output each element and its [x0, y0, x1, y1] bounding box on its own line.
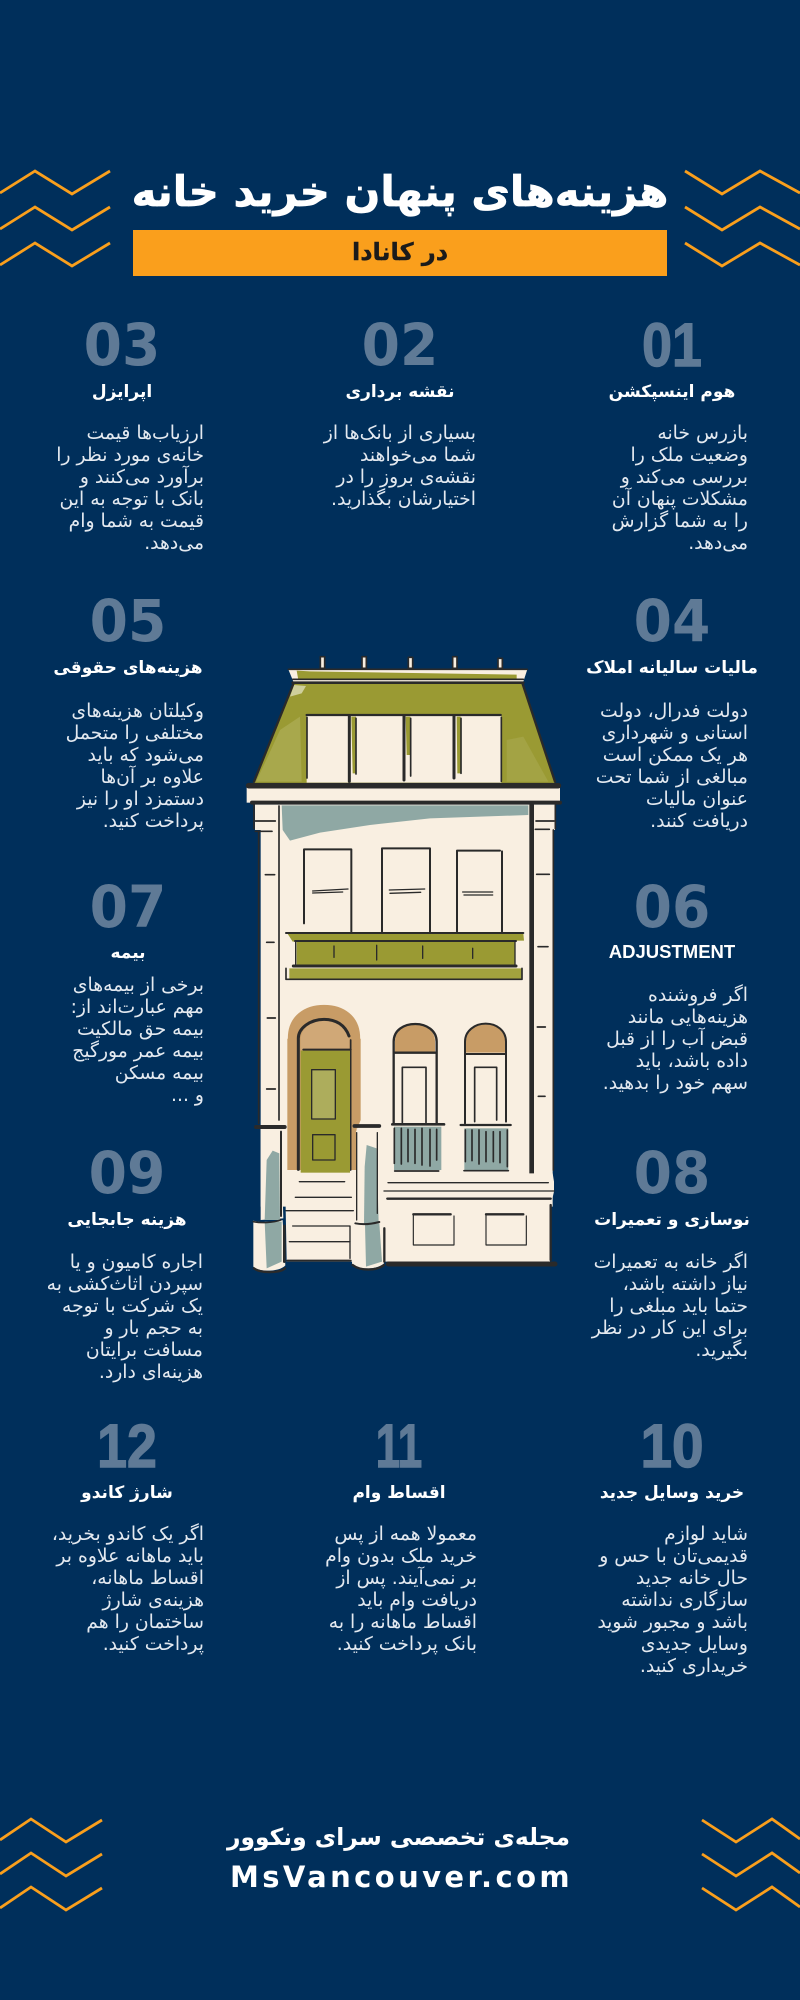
left pier	[261, 1128, 283, 1220]
panel: 07 insurance: بیمه مسکن	[115, 1063, 204, 1084]
panel: 02 survey: شما می‌خواهند	[360, 445, 476, 466]
panel: 05 legal costs: می‌شود که باید	[87, 745, 204, 766]
basement windows	[413, 1211, 523, 1218]
panel: 09 moving cost: یک شرکت با توجه	[62, 1296, 203, 1317]
panel: 03 appraisal: 03	[84, 311, 160, 379]
panel: 11 loan installments: بر نمی‌آیند. پس از	[336, 1568, 477, 1589]
panel: 08 renovation: بگیرید.	[695, 1340, 748, 1361]
illustration: townhouse	[246, 656, 562, 1274]
panel: 01 home inspection: می‌دهد.	[688, 533, 748, 554]
panel: 11 loan installments: 11	[376, 1412, 422, 1480]
finials	[320, 657, 502, 668]
panel: 07 insurance: بیمه عمر مورگیج	[72, 1041, 204, 1062]
panel: 01 home inspection	[609, 311, 748, 554]
panel: 02 survey: اختیارشان بگذارید.	[331, 489, 476, 510]
panel: 09 moving cost: 09	[89, 1139, 165, 1207]
panel: 10 new appliances: قدیمی‌تان با حس و	[599, 1546, 748, 1567]
panel: 11 loan installments: خرید ملک بدون وام	[325, 1546, 477, 1567]
panel: 11 loan installments: اقساط ماهانه را به	[329, 1612, 477, 1633]
panel: 08 renovation: برای این کار در نظر	[592, 1318, 748, 1339]
entrance arch	[287, 1004, 361, 1170]
panel: 04 property tax: مالیات سالیانه املاک	[586, 658, 758, 678]
mansard roof	[253, 684, 555, 783]
panel: 12 condo fee: شارژ کاندو	[81, 1483, 173, 1503]
door	[301, 1051, 350, 1173]
panel: 05 legal costs: وکیلتان هزینه‌های	[71, 701, 204, 722]
panel: 01 home inspection: هوم اینسپکشن	[609, 382, 735, 402]
grey wash	[282, 805, 528, 841]
subtitle banner	[133, 230, 667, 276]
panel: 06 adjustment: قبض آب را از قبل	[606, 1029, 748, 1050]
panel: 09 moving cost	[47, 1139, 203, 1383]
panel: 10 new appliances: سازگاری نداشته	[621, 1590, 748, 1611]
panel: 09 moving cost: به حجم بار و	[104, 1318, 203, 1339]
panel: 07 insurance: و ...	[171, 1085, 204, 1106]
panel: 11 loan installments: اقساط وام	[352, 1483, 446, 1503]
panel: 08 renovation: 08	[634, 1139, 710, 1207]
arched window 1	[395, 1024, 435, 1053]
panel: 11 loan installments	[325, 1412, 477, 1655]
panel: 07 insurance	[71, 873, 204, 1106]
panel: 04 property tax: استانی و شهرداری	[602, 723, 748, 744]
panel: 03 appraisal: برآورد می‌کنند و	[80, 467, 204, 488]
panel: 05 legal costs: دستمزد او را نیز	[77, 789, 204, 810]
balcony	[287, 933, 524, 942]
panel: 02 survey: نقشه برداری	[345, 382, 455, 402]
panel: 12 condo fee	[52, 1412, 204, 1655]
panel: 05 legal costs: پرداخت کنید.	[103, 811, 204, 832]
panel: 06 adjustment: داده باشد، باید	[636, 1051, 748, 1072]
footer: magazine name: مجله‌ی تخصصی سرای ونکوور	[227, 1823, 570, 1851]
panel: 08 renovation: حتما باید مبلغی را	[609, 1296, 748, 1317]
panel: 10 new appliances: وسایل جدیدی	[641, 1634, 748, 1655]
panel: 10 new appliances: حال خانه جدید	[636, 1568, 748, 1589]
panel: 11 loan installments: دریافت وام باید	[357, 1590, 477, 1611]
zigzag decoration: bottom left	[0, 1817, 103, 1912]
panel: 08 renovation	[590, 1139, 750, 1361]
dormer windows	[307, 715, 501, 783]
panel: 09 moving cost: سپردن اثاث‌کشی به	[47, 1274, 203, 1295]
panel: 01 home inspection: را به شما گزارش	[612, 511, 748, 532]
panel: 12 condo fee: اگر یک کاندو بخرید،	[52, 1524, 204, 1545]
stairs	[286, 1182, 353, 1242]
pilaster and wall lines	[254, 805, 555, 1170]
panel: 03 appraisal: خانه‌ی مورد نظر را	[56, 445, 204, 466]
panel: 04 property tax: عنوان مالیات	[646, 789, 748, 810]
panel: 12 condo fee: پرداخت کنید.	[103, 1634, 204, 1655]
panel: 03 appraisal: می‌دهد.	[144, 533, 204, 554]
panel: 12 condo fee: اقساط ماهانه،	[91, 1568, 204, 1589]
base wall	[285, 1173, 554, 1262]
subtitle banner: در کانادا	[352, 238, 448, 266]
title: هزینه‌های پنهان خرید خانه	[132, 167, 668, 216]
panel: 12 condo fee: هزینه‌ی شارژ	[102, 1590, 204, 1611]
panel: 10 new appliances: خرید وسایل جدید	[600, 1483, 744, 1503]
panel: 01 home inspection: بازرس خانه	[657, 423, 748, 444]
panel: 01 home inspection: مشکلات پنهان آن	[612, 489, 748, 510]
panel: 11 loan installments: معمولا همه از پس	[334, 1524, 477, 1545]
panel: 09 moving cost: مسافت برایتان	[86, 1340, 203, 1361]
panel: 06 adjustment: ADJUSTMENT	[609, 941, 735, 962]
panel: 11 loan installments: بانک پرداخت کنید.	[337, 1634, 477, 1655]
panel: 12 condo fee: باید ماهانه علاوه بر	[56, 1546, 204, 1567]
panel: 07 insurance: بیمه	[110, 943, 146, 963]
panel: 05 legal costs: مختلفی را متحمل	[66, 723, 204, 744]
panel: 07 insurance: 07	[90, 873, 166, 941]
panel: 06 adjustment: اگر فروشنده	[648, 985, 748, 1006]
panel: 06 adjustment: سهم خود را بدهید.	[603, 1073, 748, 1094]
panel: 03 appraisal: بانک با توجه به این	[60, 489, 204, 510]
panel: 05 legal costs: 05	[90, 587, 166, 655]
right planter	[352, 1222, 384, 1268]
panel: 04 property tax: هر یک ممکن است	[603, 745, 748, 766]
panel: 02 survey	[322, 311, 476, 510]
cream frieze band	[247, 787, 560, 803]
panel: 07 insurance: بیمه حق مالکیت	[77, 1019, 204, 1040]
panel: 03 appraisal: ارزیاب‌ها قیمت	[86, 423, 204, 444]
right pier	[357, 1128, 379, 1225]
panel: 07 insurance: برخی از بیمه‌های	[73, 975, 204, 996]
left planter	[253, 1220, 285, 1271]
panel: 08 renovation: نیاز داشته باشد،	[623, 1274, 748, 1295]
panel: 01 home inspection: وضعیت ملک را	[630, 445, 748, 466]
cornice	[288, 669, 527, 682]
panel: 03 appraisal	[56, 311, 204, 554]
panel: 09 moving cost: اجاره کامیون و یا	[70, 1252, 203, 1273]
panel: 04 property tax	[586, 587, 758, 832]
panel: 02 survey: نقشه‌ی بروز را در	[336, 467, 476, 488]
panel: 12 condo fee: 12	[97, 1412, 157, 1480]
footer: website: MsVancouver.com	[230, 1860, 573, 1894]
panel: 08 renovation: نوسازی و تعمیرات	[594, 1210, 750, 1230]
panel: 10 new appliances: خریداری کنید.	[640, 1656, 748, 1677]
panel: 03 appraisal: قیمت به شما وام	[69, 511, 204, 532]
panel: 05 legal costs: هزینه‌های حقوقی	[53, 658, 203, 678]
panel: 01 home inspection: بررسی می‌کند و	[621, 467, 748, 488]
panel: 06 adjustment: 06	[634, 873, 710, 941]
panel: 10 new appliances	[597, 1412, 748, 1677]
panel: 02 survey: بسیاری از بانک‌ها از	[324, 423, 476, 444]
panel: 03 appraisal: اپرایزل	[92, 382, 152, 402]
panel: 12 condo fee: ساختمان را هم	[86, 1612, 204, 1633]
panel: 08 renovation: اگر خانه به تعمیرات	[594, 1252, 748, 1273]
panel: 10 new appliances: باشد و مجبور شوید	[597, 1612, 748, 1633]
panel: 07 insurance: مهم عبارت‌اند از:	[71, 997, 204, 1018]
panel: 01 home inspection: 01	[642, 311, 702, 379]
panel: 06 adjustment: هزینه‌هایی مانند	[628, 1007, 748, 1028]
panel: 04 property tax: دریافت کنند.	[650, 811, 748, 832]
panel: 09 moving cost: هزینه جابجایی	[67, 1210, 187, 1230]
panel: 02 survey: 02	[362, 311, 438, 379]
zigzag decoration: bottom right	[701, 1817, 800, 1912]
upper windows	[304, 848, 502, 932]
zigzag decoration: top right	[684, 169, 800, 268]
panel: 04 property tax: دولت فدرال، دولت	[600, 701, 748, 722]
panel: 05 legal costs	[53, 587, 204, 832]
panel: 10 new appliances: شاید لوازم	[664, 1524, 748, 1545]
panel: 06 adjustment	[603, 873, 748, 1094]
panel: 10 new appliances: 10	[640, 1412, 704, 1480]
panel: 04 property tax: 04	[634, 587, 710, 655]
upper wall	[255, 805, 555, 1207]
zigzag decoration: top left	[0, 169, 111, 268]
arched window 2	[466, 1024, 505, 1053]
panel: 05 legal costs: علاوه بر آن‌ها	[100, 767, 204, 788]
panel: 04 property tax: مبالغی از شما تحت	[596, 767, 748, 788]
panel: 09 moving cost: هزینه‌ای دارد.	[99, 1362, 203, 1383]
